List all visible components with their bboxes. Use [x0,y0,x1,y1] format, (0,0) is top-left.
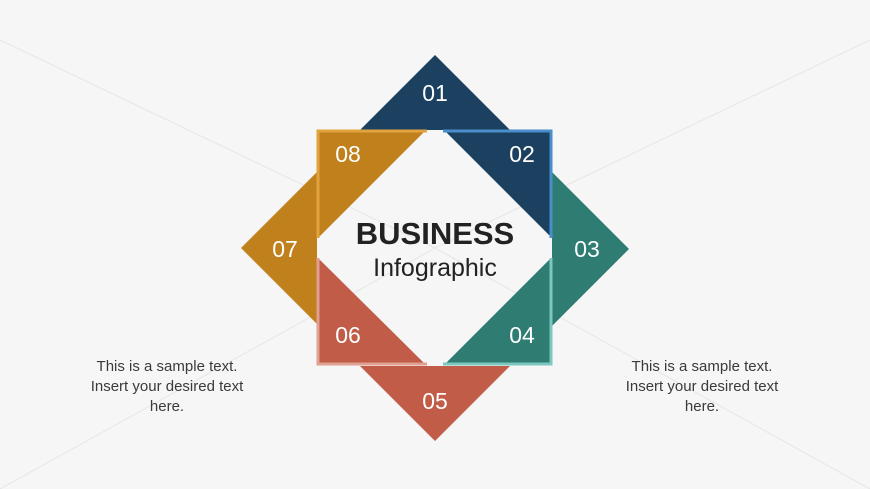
left text block: This is a sample text. [97,358,237,375]
segment 01 [360,55,510,130]
infographic diagram [241,55,629,441]
center title: BUSINESS [356,216,514,251]
segment 02: 02 [509,141,535,167]
segment 04 [445,258,551,364]
segment 05 [360,366,510,441]
right text block: This is a sample text. [632,358,772,375]
right text block: Insert your desired text [626,378,778,395]
segment 06 [318,258,425,364]
segment 08 [318,131,425,238]
segment 04: 04 [509,322,535,348]
right text block: here. [685,398,719,415]
segment 01: 01 [422,80,448,106]
segment 02 [445,131,551,237]
left text block [91,358,244,415]
left text block: here. [150,398,184,415]
segment 07 [241,172,317,324]
square outline [318,131,551,364]
left text block: Insert your desired text [91,378,243,395]
right text block [626,358,778,415]
center title: Infographic [373,254,497,282]
center title [356,216,514,282]
segment 03 [552,172,629,326]
segment 07: 07 [272,236,298,262]
segment 03: 03 [574,236,600,262]
segment 06: 06 [335,322,361,348]
segment 05: 05 [422,388,448,414]
segment 08: 08 [335,141,361,167]
